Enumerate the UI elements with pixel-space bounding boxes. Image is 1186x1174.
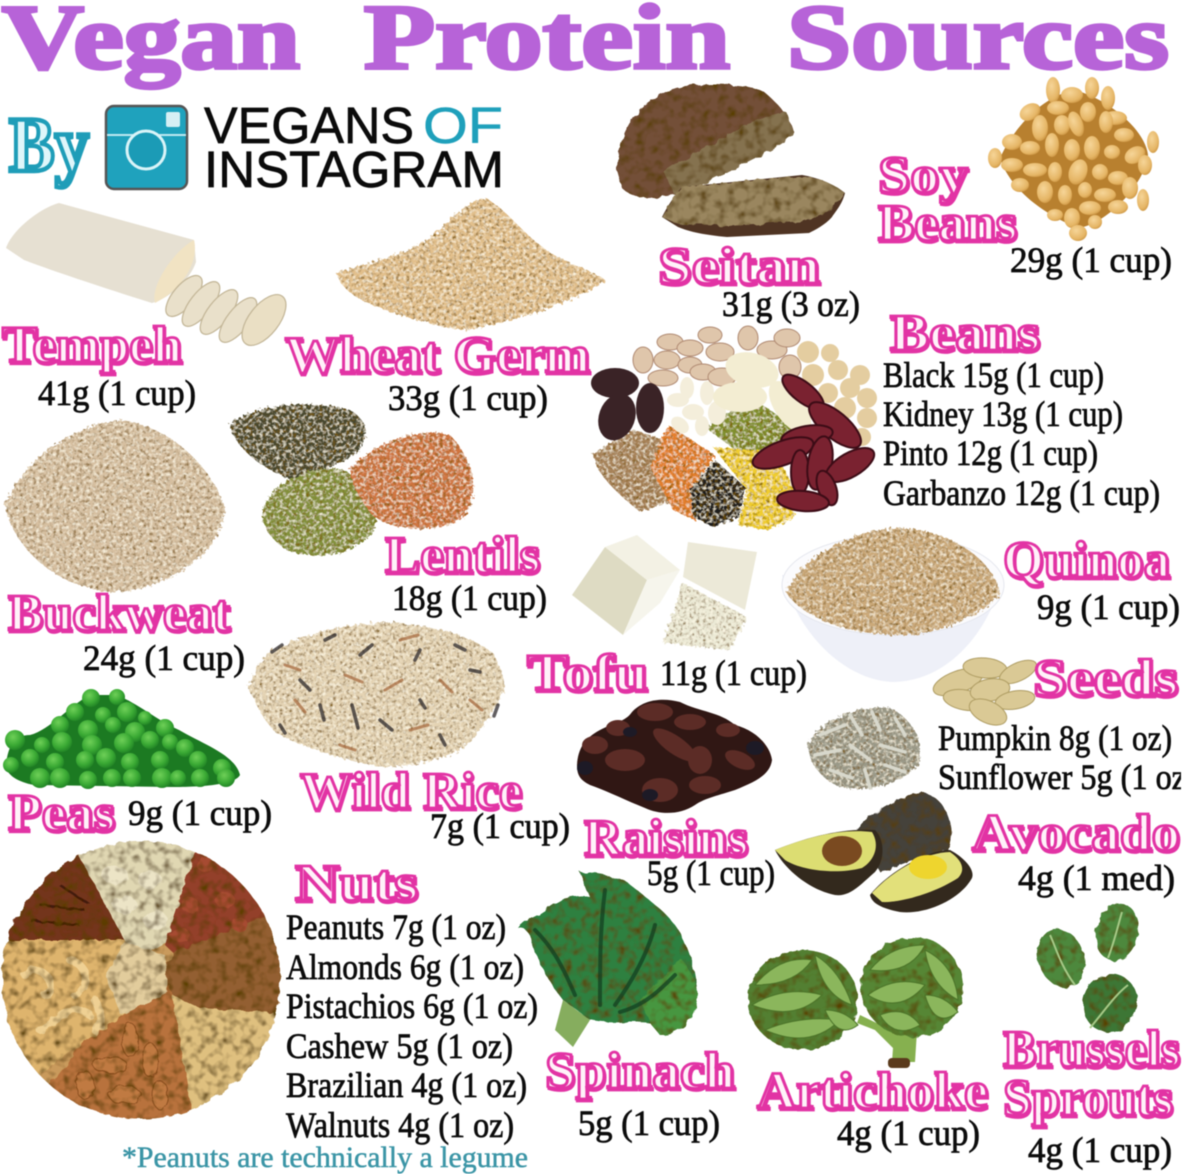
panel: buckwheat [5, 420, 245, 678]
value: 9g (1 cup) [128, 793, 272, 833]
label: Sprouts [1003, 1070, 1173, 1127]
panel: tempeh [2, 203, 294, 413]
panel: raisins [577, 700, 775, 893]
label: Avocado [972, 805, 1180, 862]
footnote: *Peanuts are technically a legume [122, 1141, 528, 1174]
label [878, 147, 1017, 252]
label: Raisins [584, 810, 748, 867]
label: Buckweat [8, 585, 231, 642]
label: Wheat Germ [285, 327, 590, 384]
panel: brussels sprouts [1003, 899, 1180, 1170]
values list: Almonds 6g (1 oz) [286, 947, 524, 987]
label: Artichoke [757, 1063, 988, 1120]
image: sunflower seeds [808, 707, 920, 789]
image: artichokes [748, 937, 963, 1068]
image: nuts wheel [0, 840, 282, 1120]
value: 31g (3 oz) [722, 284, 860, 324]
image: seitan bread [617, 85, 845, 237]
value: 11g (1 cup) [660, 653, 807, 693]
panel: beans [591, 305, 1160, 530]
panel: wild rice [248, 622, 570, 846]
logo wordmark [204, 97, 504, 198]
image: tofu cubes [572, 535, 757, 650]
label: Seeds [1033, 650, 1178, 707]
value: 4g (1 cup) [1028, 1130, 1172, 1170]
panel: seitan [617, 85, 860, 324]
image: brussels sprouts [1029, 899, 1148, 1042]
label: Quinoa [1003, 532, 1170, 589]
label: Brussels [1003, 1021, 1180, 1078]
image: avocado halves [775, 793, 973, 912]
image: soy beans [988, 77, 1159, 241]
panel: spinach [518, 872, 735, 1143]
label: Spinach [545, 1043, 735, 1100]
panel: lentils [230, 404, 547, 618]
value: 41g (1 cup) [38, 373, 196, 413]
value: 9g (1 cup) [1037, 587, 1180, 627]
image: spinach bunch [518, 872, 697, 1047]
value: 29g (1 cup) [1010, 240, 1172, 280]
image: wild rice pile [248, 622, 505, 767]
values list [883, 355, 1160, 513]
label: Tofu [527, 645, 648, 702]
image: lentil piles [230, 404, 473, 555]
values list: Peanuts 7g (1 oz) [286, 907, 506, 947]
panel: peas [3, 689, 272, 842]
value: 5g (1 cup) [578, 1103, 720, 1143]
logo wordmark: OF [423, 97, 503, 154]
values list: Kidney 13g (1 cup) [883, 394, 1123, 434]
image: raisins pile [577, 700, 772, 813]
values list: Black 15g (1 cup) [883, 355, 1104, 395]
title [2, 0, 1169, 88]
value: 7g (1 cup) [430, 806, 570, 846]
values list: Walnuts 4g (1 oz) [286, 1105, 514, 1145]
icon: instagram camera [106, 106, 187, 189]
label: Beans [890, 305, 1040, 362]
panel: avocado [775, 793, 1180, 912]
logo wordmark: INSTAGRAM [204, 141, 504, 198]
image: pumpkin seeds [930, 655, 1040, 730]
label: Lentils [385, 527, 540, 584]
label: Tempeh [2, 317, 182, 374]
label: Seitan [658, 238, 820, 295]
panel: nuts [0, 820, 538, 1174]
text: By: By [9, 101, 89, 188]
panel: tofu [527, 535, 807, 702]
values list [286, 907, 538, 1145]
label [1003, 1021, 1180, 1127]
panel: seeds [808, 650, 1186, 797]
panel: artichoke [748, 937, 988, 1153]
panel: soy beans [878, 77, 1172, 280]
image: mixed beans plate [591, 326, 879, 530]
image: buckwheat pile [5, 420, 225, 592]
label: Soy [878, 147, 968, 204]
values list [938, 718, 1186, 797]
value: 24g (1 cup) [83, 638, 245, 678]
label: Wild Rice [300, 763, 522, 820]
label: Peas [8, 785, 115, 842]
values list: Pistachios 6g (1 oz) [286, 986, 538, 1026]
value: 4g (1 med) [1018, 858, 1175, 898]
image: green peas pile [3, 689, 240, 789]
panel: wheat germ [285, 198, 605, 418]
byline: By Vegans of Instagram [9, 97, 504, 198]
logo wordmark: VEGANS [204, 97, 414, 154]
value: 33g (1 cup) [388, 378, 548, 418]
image: quinoa bowl [782, 528, 1004, 682]
image: tempeh block [6, 203, 294, 353]
value: 5g (1 cup) [647, 853, 775, 893]
label: Nuts [295, 855, 418, 912]
panel: quinoa [782, 528, 1180, 682]
values list: Brazilian 4g (1 oz) [286, 1065, 527, 1105]
value: 18g (1 cup) [392, 578, 547, 618]
value: 4g (1 cup) [837, 1113, 980, 1153]
values list: Cashew 5g (1 oz) [286, 1026, 513, 1066]
image: wheat germ pile [336, 198, 605, 330]
values list: Pinto 12g (1 cup) [883, 433, 1098, 473]
label: Beans [878, 195, 1017, 252]
